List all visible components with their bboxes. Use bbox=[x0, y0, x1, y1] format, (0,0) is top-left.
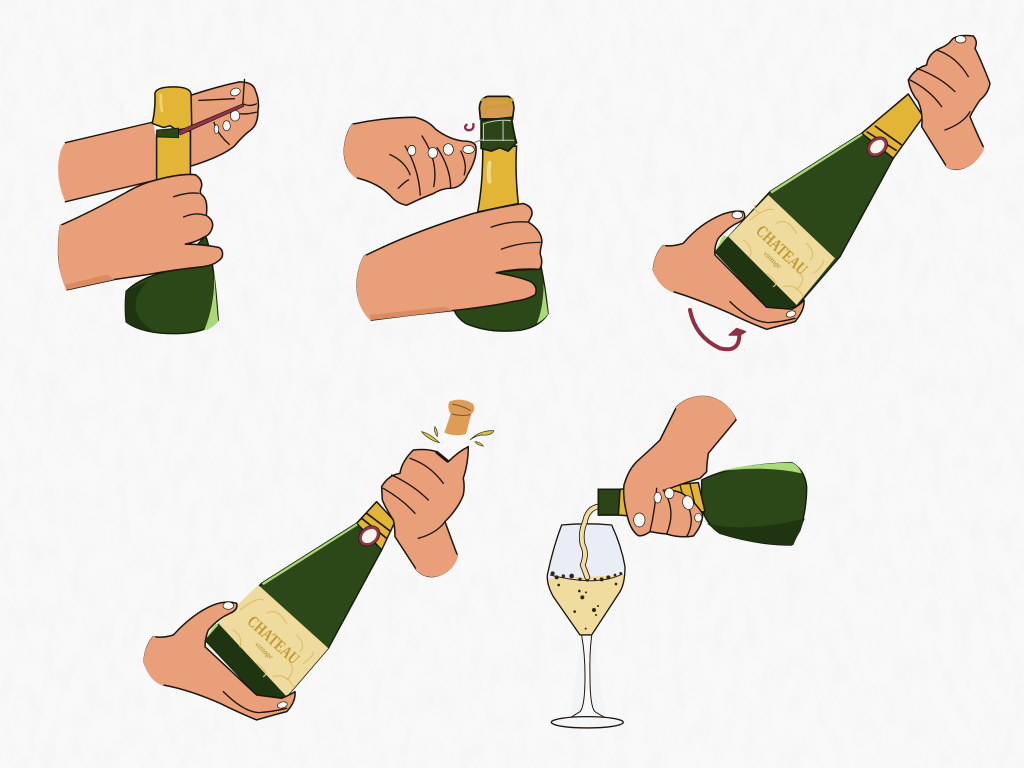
cork and wire cage bbox=[479, 96, 517, 151]
arrow: twist direction bbox=[465, 124, 473, 130]
hand cradling the bottle base bbox=[653, 211, 804, 329]
wine label: vintage bbox=[253, 640, 276, 662]
wine label bbox=[218, 585, 328, 697]
panel: step 2, loosen the wire cage bbox=[344, 96, 548, 331]
panel: step 1, remove the foil bbox=[58, 79, 258, 334]
hand twisting the wire bbox=[344, 117, 476, 205]
hand holding the bottle neck bbox=[908, 35, 990, 169]
hand with thumb pushing the cork bbox=[382, 447, 468, 577]
bottle body bbox=[454, 263, 548, 331]
bottle body bbox=[125, 236, 218, 334]
champagne splashes bbox=[422, 427, 494, 446]
hand cradling the bottle base bbox=[144, 602, 295, 720]
panel: step 4, the cork pops bbox=[144, 400, 494, 720]
foil tear strip bbox=[179, 104, 244, 135]
wine label: CHATEAU bbox=[244, 612, 303, 668]
gold foil neck bbox=[152, 87, 192, 183]
bottle bbox=[598, 463, 807, 545]
champagne stream bbox=[582, 507, 597, 577]
wine glass bbox=[547, 524, 625, 728]
panel: step 5, pour into the glass bbox=[547, 396, 807, 728]
foil collar bbox=[863, 126, 902, 161]
arrow: rotate the bottle bbox=[690, 310, 745, 349]
hand gripping the bottle bbox=[59, 174, 223, 290]
arm holding the foil tab bbox=[58, 122, 163, 202]
arm outline bbox=[65, 122, 157, 202]
hand pouring bbox=[624, 396, 736, 537]
hand gripping the bottle bbox=[357, 204, 542, 320]
bottle bbox=[205, 502, 395, 700]
flying cork bbox=[444, 400, 474, 435]
wire twist bbox=[474, 139, 483, 143]
hand pulling the foil bbox=[190, 79, 258, 166]
foil collar bbox=[355, 513, 391, 550]
panel: step 3, twist the bottle bbox=[653, 35, 990, 349]
bottle bbox=[715, 94, 923, 309]
bubbles bbox=[550, 571, 623, 630]
wine label bbox=[728, 195, 835, 305]
wine label: CHATEAU bbox=[752, 221, 811, 279]
gold neck bbox=[478, 146, 518, 212]
wine label: vintage bbox=[762, 249, 784, 271]
